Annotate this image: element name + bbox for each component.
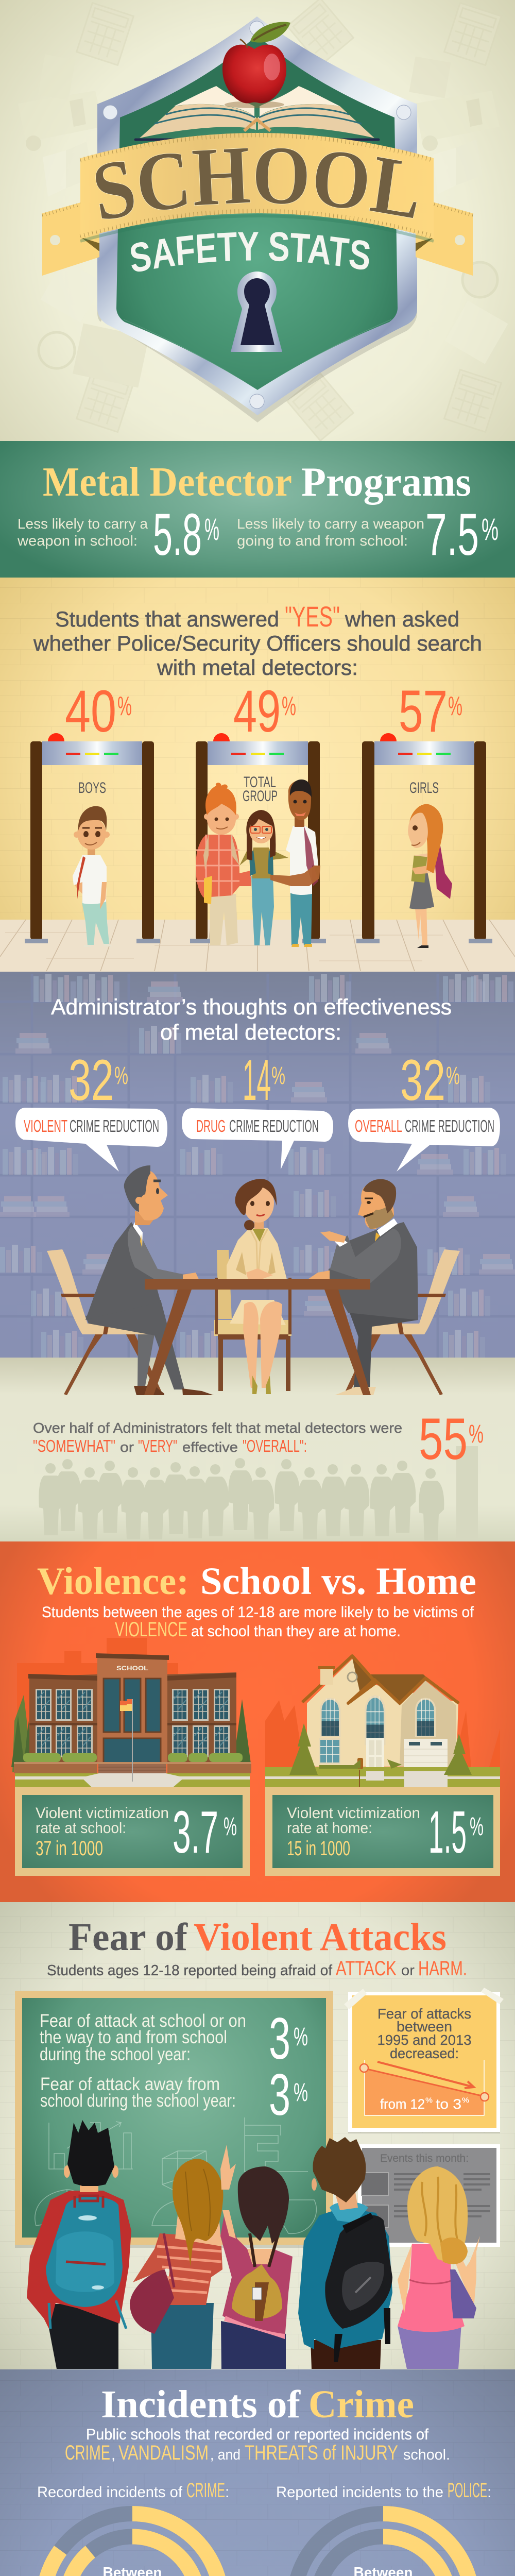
stat: weapon in school: Less likely to carry a: [18, 516, 148, 532]
card: fear decreased: Fear of attacks: [377, 2006, 471, 2022]
rivets: [103, 21, 411, 409]
speech bubble: overall crime: [348, 1108, 500, 1172]
chair: right: [344, 1249, 460, 1395]
wood floor: [0, 920, 515, 972]
stat: weapon in school: [17, 502, 219, 568]
card: fear decreased: decreased:: [390, 2045, 459, 2061]
figure: redhead boy: [196, 783, 251, 945]
chalk sketches: [35, 2117, 316, 2233]
stat: weapon in school: 5.8: [153, 502, 202, 568]
chalkboard: Fear of attack away from: [40, 2074, 220, 2094]
stat: 55%: 55: [419, 1406, 468, 1472]
chalkboard: school rate: 37 in 1000: [36, 1837, 103, 1860]
chalkboard: %: [294, 2078, 308, 2107]
heading: "YES": [285, 600, 340, 633]
book: [135, 86, 379, 140]
line chart: from 12: [380, 2096, 425, 2112]
figure: girl: [408, 804, 452, 948]
heading: Metal Detector: [43, 460, 292, 505]
label: boys: BOYS: [78, 779, 106, 796]
chalkboard: during the school year:: [40, 2044, 191, 2064]
line chart: [360, 2060, 489, 2115]
heading: Administrator’s thoughts on effectiveness: [51, 995, 452, 1020]
table: [144, 1279, 371, 1395]
heading: Violent Attacks: [194, 1916, 447, 1959]
illustration: house: [265, 1656, 500, 1788]
subheading: THREATS of INJURY: [245, 2442, 398, 2464]
heading: whether Police/Security Officers should search: [33, 631, 482, 655]
stat: weapon to and from school: Less likely to carry a weapon: [237, 516, 424, 532]
detector: total group: [190, 733, 326, 943]
line chart: to 3: [436, 2096, 461, 2112]
label: reported police: :: [487, 2484, 491, 2501]
speech bubble: drug crime: [182, 1108, 333, 1170]
illustration: school: [11, 1638, 251, 1787]
heading: [51, 995, 452, 1045]
stat: boys: 40: [65, 679, 116, 744]
crowd silhouettes: [39, 1446, 478, 1541]
chalkboard: home rate: [265, 1787, 500, 1876]
card: events this month: [358, 2144, 500, 2247]
subheading: school.: [403, 2447, 450, 2463]
stat: weapon to and from school: 7.5: [425, 502, 479, 568]
heading: Violence:: [37, 1560, 189, 1603]
subheading: [47, 1957, 467, 1980]
stat: total group: 49: [233, 679, 281, 744]
figure: student 2 with orange hair: [130, 2159, 223, 2369]
illustration: school: SCHOOL: [116, 1665, 148, 1672]
panel: incidents of crime: [0, 2369, 515, 2576]
figure: man left: [85, 1165, 214, 1395]
subheading: VANDALISM: [118, 2442, 209, 2464]
panel: metal detector programs: [0, 441, 515, 578]
text: over half of administrators: effective: [182, 1439, 238, 1455]
chalkboard: home rate: 15 in 1000: [287, 1837, 350, 1860]
chalkboard: school during the school year:: [40, 2091, 236, 2111]
heading: when asked: [345, 607, 459, 631]
stat: 32% overall: %: [446, 1062, 460, 1090]
chair: left: [47, 1249, 163, 1395]
text: over half of administrators: "OVERALL":: [243, 1436, 307, 1455]
chalkboard: 3: [269, 2062, 290, 2128]
shield: [97, 16, 417, 422]
speech bubble: overall crime: OVERALL: [355, 1116, 402, 1136]
subheading: [42, 1604, 474, 1641]
chalkboard: school rate: 3.7: [173, 1799, 218, 1866]
card: fear decreased: [344, 1988, 504, 2133]
chalkboard: school rate: %: [224, 1812, 237, 1841]
heading: School vs. Home: [200, 1560, 476, 1603]
subheading: Students between the ages of 12-18 are more likely to be victims of: [42, 1604, 474, 1621]
title: SCHOOL: SCHOOL: [95, 147, 417, 219]
subheading: Public schools that recorded or reported incidents of: [86, 2426, 429, 2443]
chalkboard: school rate: rate at school:: [36, 1820, 126, 1837]
figure: boy: [73, 806, 112, 947]
subheading: ATTACK: [336, 1957, 397, 1980]
figure: woman: [214, 1179, 291, 1394]
text: over half of administrators: "VERY": [138, 1436, 177, 1455]
subheading: , and: [210, 2447, 241, 2463]
panel: hero: [0, 0, 515, 441]
label: girls: GIRLS: [409, 779, 439, 796]
icon: keyhole: [231, 272, 282, 352]
heading: Fear of: [68, 1916, 188, 1959]
subheading: CRIME: [65, 2442, 110, 2464]
line chart: %: [462, 2096, 469, 2104]
chalkboard: Fear of attack at school or on: [40, 2011, 246, 2031]
speech bubble: violent crime: CRIME REDUCTION: [70, 1116, 159, 1136]
text: over half of administrators: [33, 1420, 402, 1455]
donut: crime: [43, 2514, 221, 2576]
subheading: HARM.: [418, 1957, 467, 1980]
panel: students survey wall: [0, 578, 515, 972]
ruler ribbon: [42, 133, 473, 276]
stat: 32% violent: 32: [68, 1048, 114, 1112]
stat: girls: 57: [399, 679, 448, 744]
subheading: or: [401, 1962, 415, 1979]
subheading: [65, 2426, 450, 2464]
speech bubble: violent crime: VIOLENT: [24, 1116, 67, 1136]
heading: Students that answered: [55, 607, 279, 631]
figure: tall boy: [270, 779, 320, 947]
label: total group: TOTAL: [244, 774, 276, 791]
line chart: %: [425, 2096, 433, 2104]
chalkboard: home rate: 1.5: [428, 1799, 467, 1866]
stat: 32% violent: %: [114, 1062, 128, 1090]
label: reported police: Reported incidents to the: [276, 2484, 443, 2501]
figure: student 1 with teal backpack: [27, 2120, 131, 2369]
heading: of metal detectors:: [160, 1020, 341, 1045]
chalkboard: home rate: %: [470, 1812, 484, 1841]
card: fear decreased: 1995 and 2013: [377, 2032, 472, 2048]
stat: 14% drug: 14: [243, 1048, 271, 1112]
subheading: at school than they are at home.: [191, 1623, 401, 1640]
detector: girls: [356, 733, 492, 943]
panel: fear of violent attacks: [0, 1902, 515, 2369]
heading: Programs: [301, 460, 471, 505]
text: over half of administrators: Over half of Administrators felt that metal detectors were: [33, 1420, 402, 1436]
label: recorded crime: Recorded incidents of: [37, 2484, 183, 2501]
chalkboard: home rate: rate at home:: [287, 1820, 372, 1837]
heading: Incidents of: [101, 2383, 301, 2426]
text: over half of administrators: or: [120, 1439, 134, 1455]
stat: total group: %: [282, 691, 296, 721]
card: events this month: Events this month:: [380, 2153, 469, 2164]
stat: 32% overall: 32: [400, 1048, 445, 1112]
stat: weapon in school: %: [204, 512, 219, 547]
chalkboard: 3: [269, 2006, 290, 2072]
subheading: ,: [111, 2447, 115, 2463]
stat: boys: %: [117, 691, 132, 721]
chalkboard: %: [294, 2022, 308, 2051]
icon: apple: [222, 22, 290, 108]
stat: 14% drug: [243, 1048, 285, 1112]
stat: weapon in school: weapon in school:: [17, 533, 138, 549]
stat: 55%: %: [469, 1419, 484, 1448]
title: SAFETY STATS: SAFETY STATS: [131, 232, 370, 272]
card: fear decreased: between: [397, 2019, 452, 2035]
figure: student 4 with black backpack: [298, 2137, 392, 2369]
stat: girls: %: [448, 691, 462, 721]
label: total group: GROUP: [243, 788, 278, 805]
background school pattern: [18, 0, 508, 440]
figure: man right: [308, 1179, 418, 1395]
speech bubble: drug crime: DRUG: [196, 1116, 226, 1136]
bookshelves: [0, 974, 515, 1358]
chalkboard: the way to and from school: [40, 2027, 227, 2047]
heading: [33, 600, 482, 680]
donut: police: [294, 2514, 472, 2576]
stat: weapon to and from school: going to and from school:: [237, 533, 408, 549]
chalkboard: [15, 1991, 333, 2248]
speech bubble: drug crime: CRIME REDUCTION: [229, 1116, 319, 1136]
stat: weapon to and from school: [237, 502, 499, 568]
beige floor: [0, 1358, 515, 1541]
speech bubble: violent crime: [15, 1108, 167, 1172]
label: recorded crime: :: [225, 2484, 229, 2501]
detector: boys: [25, 733, 160, 943]
label: recorded crime: CRIME: [186, 2479, 225, 2502]
chalkboard: school rate: [15, 1787, 250, 1876]
stat: weapon to and from school: %: [482, 512, 499, 547]
figure: student 5 with blonde hair: [398, 2166, 480, 2369]
figure: girl with glasses: [239, 810, 288, 945]
subheading: Students ages 12-18 reported being afraid of: [47, 1962, 333, 1979]
heading: Crime: [308, 2383, 414, 2426]
heading: with metal detectors:: [157, 655, 358, 680]
figure: student 3 raising hand: [220, 2145, 293, 2369]
subheading: VIOLENCE: [115, 1618, 187, 1641]
text: over half of administrators: "SOMEWHAT": [33, 1436, 115, 1455]
chalkboard: school rate: Violent victimization: [36, 1805, 169, 1822]
chalkboard: home rate: Violent victimization: [287, 1805, 420, 1822]
stat: 14% drug: %: [271, 1062, 285, 1090]
panel: administrators: [0, 972, 515, 1541]
panel: violence school vs home: [0, 1541, 515, 1902]
